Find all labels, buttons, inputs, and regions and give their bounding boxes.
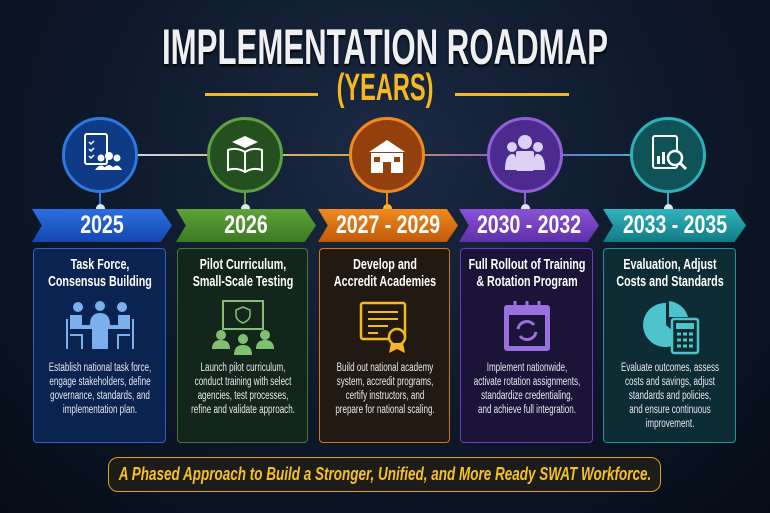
- panel: 2033-2035: improvement.: [645, 418, 694, 430]
- banner: 2030-2032: 2030 - 2032: [477, 211, 581, 239]
- panel: 2026: refine and validate approach.: [191, 404, 294, 416]
- bottom callout: A Phased Approach to Build a Stronger, Unified, and More Ready SWAT Workforce.: [118, 464, 651, 484]
- panel: 2025: governance, standards, and: [50, 390, 149, 402]
- banner: 2030-2032: [459, 209, 599, 242]
- panel: 2030-2032: standardize credentialing,: [481, 390, 572, 402]
- panel: 2030-2032: Implement nationwide,: [486, 362, 567, 374]
- panel: 2033-2035: costs and savings, adjust: [625, 376, 714, 388]
- panel: 2026: conduct training with select: [194, 376, 291, 388]
- panel: 2025: engage stakeholders, define: [49, 376, 150, 388]
- banner: 2027-2029: [318, 209, 458, 242]
- panel: 2027-2029: system, accredit programs,: [336, 376, 433, 388]
- connector lines: [205, 93, 318, 96]
- subtitle: years: (YEARS): [337, 67, 433, 109]
- panel: 2033-2035: [603, 248, 736, 443]
- panel: 2026: [177, 248, 308, 443]
- panel: 2027-2029: Accredit Academies: [333, 274, 436, 290]
- panel: 2025: Consensus Building: [48, 274, 151, 290]
- bottom callout: [108, 457, 661, 492]
- banner: 2026: 2026: [224, 211, 268, 239]
- banner: 2033-2035: [603, 209, 746, 242]
- panel: 2026: agencies, test processes,: [197, 390, 288, 402]
- banner: 2025: 2025: [80, 211, 124, 239]
- panel: 2027-2029: Build out national academy: [336, 362, 433, 374]
- banner: 2033-2035: 2033 - 2035: [622, 211, 727, 239]
- panel: 2030-2032: & Rotation Program: [476, 274, 577, 290]
- icon: meeting: [66, 301, 134, 349]
- panel: 2027-2029: Develop and: [353, 257, 416, 273]
- banner: 2025: [32, 209, 172, 242]
- panel: 2025: [33, 248, 166, 443]
- panel: 2033-2035: and ensure continuous: [629, 404, 710, 416]
- icon: pie and calculator: [643, 301, 700, 354]
- circle: 2026: [207, 117, 283, 193]
- icon: certificate: [360, 302, 406, 353]
- panel: 2033-2035: standards and policies,: [628, 390, 711, 402]
- panel: 2033-2035: Evaluate outcomes, assess: [620, 362, 718, 374]
- title: IMPLEMENTATION ROADMAP: [162, 20, 608, 75]
- panel: 2025: Task Force,: [70, 257, 129, 273]
- panel: 2027-2029: certify instructors, and: [345, 390, 424, 402]
- panel: 2027-2029: prepare for national scaling.: [335, 404, 434, 416]
- circle: 2030-2032: [487, 117, 563, 193]
- banner: 2026: [176, 209, 316, 242]
- panel: 2026: Launch pilot curriculum,: [200, 362, 285, 374]
- circle: 2027-2029: [349, 117, 425, 193]
- icon: calendar rotation: [504, 301, 550, 351]
- panel: 2033-2035: Evaluation, Adjust: [623, 257, 716, 273]
- panel: 2030-2032: activate rotation assignments,: [473, 376, 580, 388]
- panel: 2030-2032: Full Rollout of Training: [468, 257, 585, 273]
- panel: 2027-2029: [319, 248, 450, 443]
- icon: classroom: [212, 300, 274, 355]
- panel: 2026: Pilot Curriculum,: [199, 257, 286, 273]
- panel: 2025: Establish national task force,: [48, 362, 151, 374]
- circle: 2025: [62, 117, 138, 193]
- panel: 2033-2035: Costs and Standards: [616, 274, 723, 290]
- panel: 2030-2032: and achieve full integration.: [477, 404, 576, 416]
- panel: 2030-2032: [460, 248, 593, 443]
- banner: 2027-2029: 2027 - 2029: [336, 211, 440, 239]
- panel: 2025: implementation plan.: [62, 404, 137, 416]
- panel: 2026: Small-Scale Testing: [192, 274, 293, 290]
- stems and dots: [99, 193, 101, 209]
- circle: 2033-2035: [630, 117, 706, 193]
